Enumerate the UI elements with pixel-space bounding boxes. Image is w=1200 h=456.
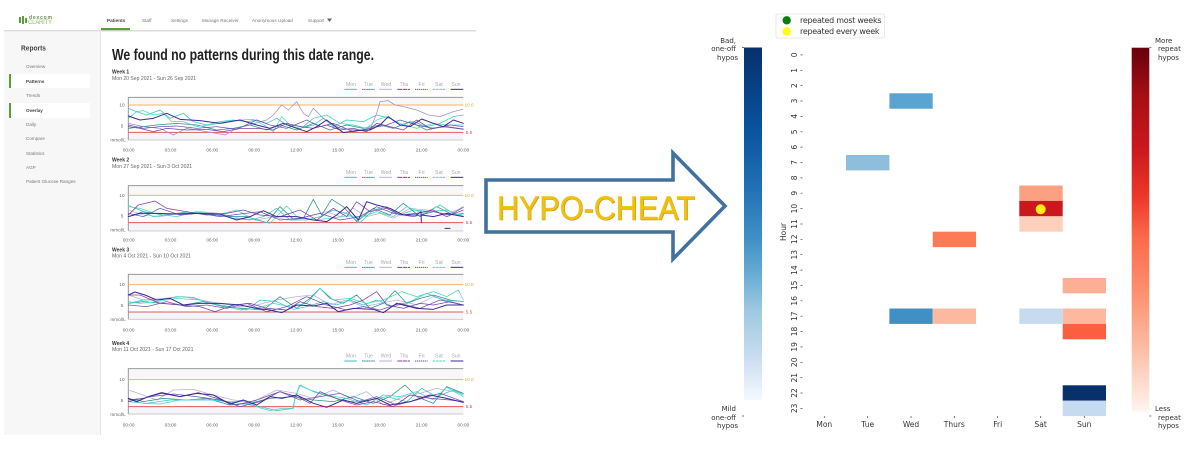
week 3 chart: 00:00 [458,328,470,332]
y axis: hour: 11 [790,219,799,229]
y axis: hour: 1 [790,68,799,73]
week 1 chart: 18:00 [374,148,386,152]
y axis: hour: 22 [790,388,799,398]
week 2 chart: Tue [364,170,373,176]
sidebar [4,32,101,435]
y axis: hour: 8 [790,175,799,180]
top navigation: Patients [107,18,126,23]
arrow label: HYPO-CHEAT [497,189,695,226]
week 4 chart: Mon [346,354,356,360]
week 4 chart: 15:00 [332,422,344,428]
y axis: hour: 3 [790,98,799,103]
week 4 chart: Thu [400,354,409,360]
colorbar: repeat hypos (red): repeat [1158,414,1181,422]
week 1 chart: 5 [121,124,124,128]
top navigation: Staff [142,18,152,23]
legend: repeated every week [800,27,880,36]
week 2 chart [110,158,474,242]
colorbar: one-off hypos (blue): Mild [722,405,736,413]
week 3 chart [110,248,474,332]
week 4 chart: Sun [451,354,461,360]
week 4 chart: 10 [119,377,125,382]
week 2 chart: 00:00 [458,238,470,242]
week 3 chart: mmol/L [110,317,126,322]
week 2 chart: Wed [381,170,391,176]
sidebar: Reports [21,44,46,52]
week 3 chart: Tue [364,260,373,266]
week 4 chart: Wed [381,354,391,360]
week 4 chart: 12:00 [290,422,302,428]
week 1 chart: Wed [381,82,391,88]
week 4 chart: 5 [121,398,124,403]
y axis: hour: 12 [790,234,799,244]
y axis: hour: 15 [790,280,799,290]
colorbar: repeat hypos (red) [1132,37,1181,430]
y axis: hour: 5 [790,129,799,134]
week 4 chart: 10.0 [464,377,474,382]
x axis: weekdays: Sat [1035,420,1047,429]
week 3 chart: 5.5 [466,310,473,314]
week 3 chart: 21:00 [416,328,428,332]
week 4 chart: 00:00 [123,422,135,428]
sidebar: Overview [26,64,46,69]
week 1 chart: 10 [119,102,125,108]
colorbar: one-off hypos (blue): Bad, [720,37,736,45]
top navigation: dexcom [29,15,53,21]
sidebar: Statistics [26,151,45,156]
week 2 chart: 09:00 [248,238,260,242]
week 4 chart: Fri [419,354,424,360]
week 1 chart: Sun [451,82,461,88]
arrow label: HYPO-CHEAT [498,190,696,227]
week 1 chart: Mon [346,82,356,88]
week 3 chart: 15:00 [332,328,344,332]
week 3 chart: Sat [435,260,443,266]
y axis: hour: 16 [790,296,799,306]
y axis: hour: 20 [790,357,799,367]
week 4 chart: Week 4 [112,341,129,347]
y axis: hour: 17 [790,311,799,321]
week 1 chart: 21:00 [416,148,428,152]
week 4 chart: Mon 11 Oct 2021 - Sun 17 Oct 2021 [112,347,194,353]
y axis: hour: 23 [790,403,799,413]
week 4 chart: Sat [435,354,443,360]
week 4 chart: 18:00 [374,422,386,428]
week 2 chart: Fri [419,170,424,176]
colorbar: one-off hypos (blue): one-off [711,414,736,422]
week 1 chart: Thu [400,82,409,88]
y axis: hour: 6 [790,144,799,149]
top navigation: Manage Receiver [202,18,239,23]
y axis: hour: 9 [790,191,799,196]
week 2 chart: 10 [119,193,125,198]
x axis: weekdays: Mon [816,420,832,429]
week 1 chart: Mon 20 Sep 2021 - Sun 26 Sep 2021 [112,76,196,82]
week 3 chart: Mon [346,260,356,266]
week 3 chart: Week 3 [112,248,129,254]
week 4 chart: mmol/L [110,412,126,417]
colorbar: one-off hypos (blue): one-off [711,45,736,53]
week 2 chart: mmol/L [110,228,126,232]
week 3 chart: Wed [381,260,391,266]
week 2 chart: 06:00 [206,238,219,242]
colorbar: repeat hypos (red): More [1155,37,1172,45]
week 1 chart: 00:00 [458,148,470,152]
week 1 chart [110,70,474,152]
week 1 chart: 06:00 [206,148,219,152]
sidebar: Overlay [26,108,43,113]
week 1 chart: 5.5 [466,130,473,135]
week 1 chart: Sat [435,82,443,88]
x axis: weekdays: Thurs [943,420,965,429]
sidebar: AGP [26,165,36,170]
y axis: hour: 10 [790,204,799,213]
arrow: Hypo-Cheat [486,153,725,259]
y axis: hour: 19 [790,342,799,352]
week 1 chart: 00:00 [123,148,135,152]
sidebar: Compare [26,136,45,141]
week 3 chart: 06:00 [206,328,219,332]
week 4 chart: 09:00 [248,422,260,428]
marker: repeated every week [1036,204,1046,214]
heading: We found no patterns during this date range. [112,47,374,64]
legend [776,14,884,38]
week 2 chart: 03:00 [165,238,177,242]
y axis: hour: 4 [790,114,799,119]
week 3 chart: Fri [419,260,424,266]
week 1 chart: mmol/L [110,138,126,142]
week 2 chart: Mon 27 Sep 2021 - Sun 3 Oct 2021 [112,164,192,170]
y axis: hour: 2 [790,83,799,88]
week 2 chart: 21:00 [416,238,428,242]
week 1 chart: 15:00 [332,148,344,152]
week 3 chart: 09:00 [248,328,260,332]
week 2 chart: Thu [400,170,409,176]
week 4 chart: 00:00 [458,422,470,428]
legend: repeated most weeks [800,16,882,25]
week 3 chart: Thu [400,260,409,266]
week 3 chart: 00:00 [123,328,135,332]
week 4 chart [110,341,474,428]
y axis: hour: 18 [790,327,799,336]
x axis: weekdays: Fri [993,420,1002,429]
week 1 chart: 12:00 [290,148,302,152]
top navigation: CLARITY [28,20,52,26]
week 3 chart: 03:00 [165,328,177,332]
week 2 chart: 10.0 [464,193,474,198]
y axis: hour: Hour [779,222,788,241]
week 1 chart: Fri [419,82,424,88]
x axis: weekdays: Wed [903,420,919,429]
week 1 chart: 09:00 [248,148,260,152]
week 1 chart: 10.0 [464,102,474,108]
week 3 chart: 5 [121,303,124,308]
y axis: hour [779,52,802,413]
x axis: weekdays: Sun [1077,420,1092,429]
week 2 chart: 5.5 [466,220,473,225]
week 1 chart: Tue [364,82,373,88]
week 3 chart: Sun [451,260,461,266]
y axis: hour: 14 [790,265,799,275]
week 2 chart: 15:00 [332,238,344,242]
week 2 chart: 5 [121,214,124,218]
colorbar: repeat hypos (red): Less [1155,405,1171,413]
heatmap cells [846,93,1106,416]
Clarity report screenshot panel [4,15,476,436]
top navigation [4,15,476,32]
colorbar: one-off hypos (blue) [711,37,762,430]
week 2 chart: Week 2 [112,158,129,164]
colorbar: one-off hypos (blue): hypos [717,54,738,62]
top navigation: Settings [171,18,189,23]
week 3 chart: 10.0 [464,282,474,287]
top navigation: Anonymous Upload [252,18,293,23]
week 2 chart: 18:00 [374,238,386,242]
sidebar: Patterns [26,79,45,84]
week 3 chart: 12:00 [290,328,302,332]
x axis: weekdays: Tue [860,420,874,429]
sidebar: Patient Glucose Ranges [26,179,76,184]
week 3 chart: 10 [119,282,125,287]
week 4 chart: 5.5 [466,404,473,409]
colorbar: repeat hypos (red): hypos [1158,54,1179,62]
top navigation: Support [308,18,325,23]
week 4 chart: 21:00 [416,422,428,428]
week 3 chart: 18:00 [374,328,386,332]
y axis: hour: 21 [790,373,799,382]
week 3 chart: Mon 4 Oct 2021 - Sun 10 Oct 2021 [112,254,191,260]
y axis: hour: 7 [790,160,799,165]
sidebar: Trends [26,93,41,98]
week 4 chart: Tue [364,354,373,360]
week 2 chart: 00:00 [123,238,135,242]
week 1 chart: 03:00 [165,148,177,152]
colorbar: repeat hypos (red): repeat [1158,45,1181,53]
y axis: hour: 13 [790,250,799,259]
week 2 chart: Sat [435,170,443,176]
sidebar: Daily [26,122,37,127]
colorbar: one-off hypos (blue): hypos [717,422,738,430]
colorbar: repeat hypos (red): hypos [1158,422,1179,430]
week 1 chart: Week 1 [112,70,129,76]
week 4 chart: 03:00 [165,422,177,428]
heatmap: hypos by hour and weekday [779,52,1106,429]
week 2 chart: 12:00 [290,238,302,242]
week 2 chart: Mon [346,170,356,176]
week 4 chart: 06:00 [206,422,219,428]
week 2 chart: Sun [451,170,461,176]
y axis: hour: 0 [790,52,799,57]
x axis: weekdays [816,416,1092,429]
